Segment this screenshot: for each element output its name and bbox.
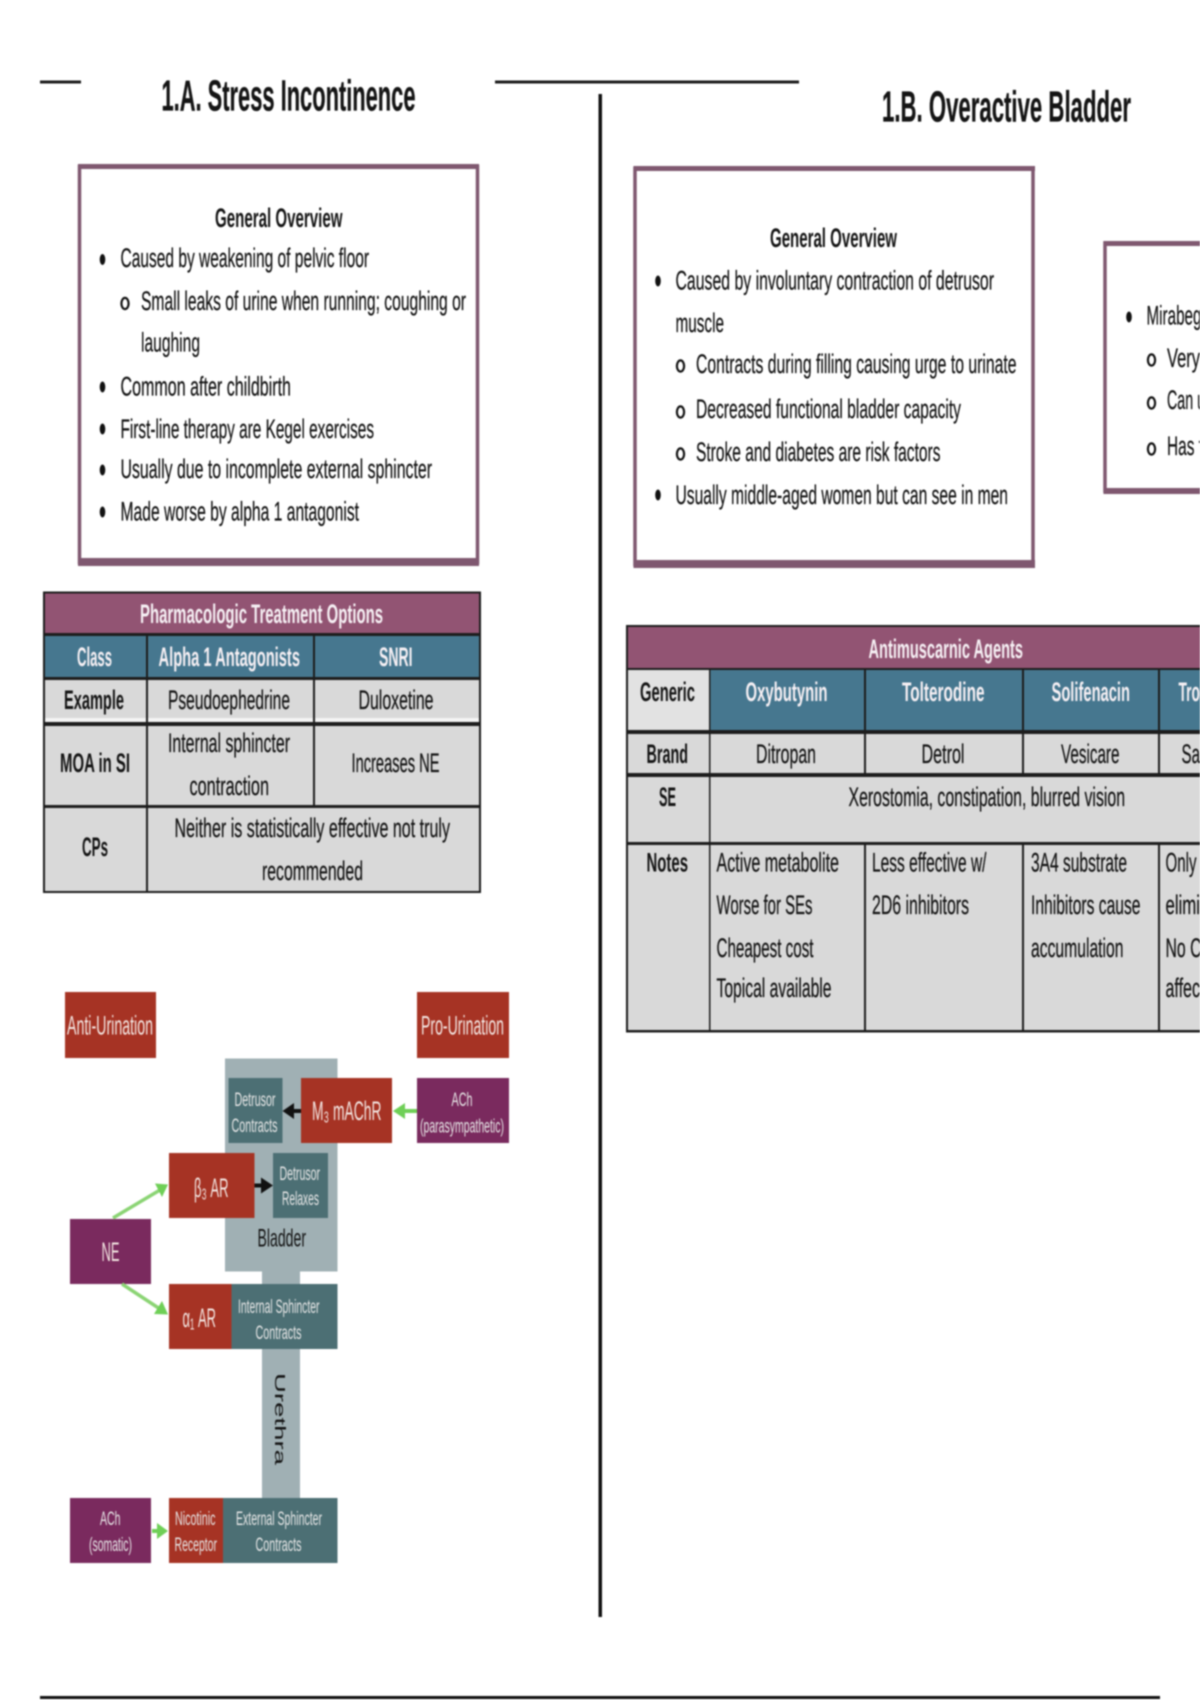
box: nicotinic receptor: Nicotinic bbox=[175, 1509, 216, 1530]
row: brand names: Vesicare bbox=[1061, 739, 1120, 769]
table title: Antimuscarnic Agents bbox=[868, 634, 1023, 664]
row: notes: Topical available bbox=[716, 973, 832, 1003]
row: generic names: Oxybutynin bbox=[746, 677, 828, 707]
box: detrusor contracts: Contracts bbox=[232, 1116, 278, 1137]
row: MOA in SI: MOA in SI bbox=[60, 748, 130, 778]
table title: Pharmacologic Treatment Options bbox=[140, 599, 383, 629]
box: nicotinic receptor bbox=[169, 1498, 223, 1563]
text: 1.A. Stress Incontinence bbox=[162, 72, 416, 120]
box: nicotinic receptor: Receptor bbox=[174, 1535, 217, 1556]
arrow: NE to beta 3 bbox=[113, 1184, 168, 1218]
arrow: M3 to detrusor contracts bbox=[282, 1103, 301, 1119]
box: detrusor relaxes: Detrusor bbox=[280, 1164, 320, 1185]
row: example: Pseudoephedrine bbox=[168, 685, 290, 715]
box: M3 mAChR bbox=[301, 1078, 392, 1143]
row: example: Duloxetine bbox=[358, 685, 434, 715]
bullet list: stress incontinence facts: Usually due to incomplete external sphincter bbox=[120, 454, 432, 484]
row: example bbox=[64, 685, 434, 715]
row: brand names: Detrol bbox=[922, 739, 964, 769]
header row: Alpha 1 Antagonists bbox=[158, 642, 300, 672]
row: side effects: SE bbox=[659, 782, 676, 812]
box: beta 3 AR: β₃ AR bbox=[194, 1173, 228, 1203]
row: generic names: Generic bbox=[640, 677, 695, 707]
box: anti-urination bbox=[65, 992, 156, 1058]
row: generic names: Solifenacin bbox=[1052, 677, 1130, 707]
row: notes: Notes bbox=[646, 848, 688, 878]
row: MOA in SI: contraction bbox=[190, 771, 269, 801]
bullet list: stress incontinence facts: Common after childbirth bbox=[120, 372, 291, 402]
box: external sphincter contracts: External Sphincter bbox=[236, 1509, 322, 1530]
row: notes: Active metabolite bbox=[716, 848, 839, 878]
arrow: ACh to M3 bbox=[393, 1103, 417, 1119]
row: MOA in SI: Increases NE bbox=[352, 748, 440, 778]
box: external sphincter contracts bbox=[223, 1498, 338, 1563]
row: CPs: Neither is statistically effective not truly bbox=[174, 813, 450, 843]
bullet list: overactive bladder facts: Stroke and diabetes are risk factors bbox=[696, 437, 940, 467]
box: alpha 1 AR: α₁ AR bbox=[182, 1303, 216, 1333]
box: M3 mAChR: M₃ mAChR bbox=[312, 1096, 382, 1126]
box: ACh parasympathetic: ACh bbox=[452, 1090, 472, 1111]
row: brand names bbox=[646, 739, 1200, 769]
box: external sphincter contracts: Contracts bbox=[256, 1535, 302, 1556]
panel: stress incontinence general overview bbox=[78, 164, 479, 566]
bullet list: stress incontinence facts: Made worse by alpha 1 antagonist bbox=[120, 496, 359, 526]
box: NE: NE bbox=[102, 1237, 120, 1267]
heading: general overview: General Overview bbox=[770, 223, 897, 253]
table: pharmacologic treatment options bbox=[43, 592, 481, 893]
box: detrusor relaxes: Relaxes bbox=[282, 1189, 319, 1210]
box: ACh parasympathetic bbox=[417, 1078, 509, 1143]
row: generic names: Tolterodine bbox=[902, 677, 984, 707]
row: generic names bbox=[640, 677, 1200, 707]
box: pro-urination bbox=[417, 992, 509, 1058]
row: CPs bbox=[82, 813, 450, 886]
label: urethra: Urethra bbox=[271, 1373, 288, 1466]
table: antimuscarnic agents bbox=[626, 625, 1200, 1032]
row: notes: Worse for SEs bbox=[716, 890, 812, 920]
box: internal sphincter contracts: Contracts bbox=[256, 1323, 302, 1344]
row: notes bbox=[646, 848, 1200, 1003]
row: notes: 3A4 substrate bbox=[1031, 848, 1127, 878]
row: CPs: CPs bbox=[82, 832, 108, 862]
bullet list: overactive bladder facts: Caused by involuntary contraction of detrusor bbox=[676, 266, 994, 296]
row: side effects bbox=[659, 782, 1125, 812]
box: detrusor contracts bbox=[228, 1078, 282, 1143]
row: notes: Less effective w/ bbox=[872, 848, 987, 878]
panel: overactive bladder general overview bbox=[634, 166, 1035, 568]
header row: SNRI bbox=[379, 642, 412, 672]
label: bladder: Bladder bbox=[258, 1224, 306, 1252]
bullet list: overactive bladder facts bbox=[655, 266, 1016, 510]
box: beta 3 AR bbox=[169, 1153, 254, 1218]
box: ACh somatic: (somatic) bbox=[89, 1535, 132, 1556]
diagram: urinary receptor pathways bbox=[65, 992, 509, 1563]
box: internal sphincter contracts bbox=[232, 1284, 338, 1349]
bullet list: stress incontinence facts: Caused by weakening of pelvic floor bbox=[120, 243, 369, 273]
bullet list: stress incontinence facts: Small leaks of urine when running; coughing or bbox=[141, 286, 466, 316]
box: ACh somatic bbox=[70, 1498, 151, 1563]
bullet list: stress incontinence facts bbox=[100, 243, 466, 526]
row: MOA in SI bbox=[60, 728, 440, 801]
row: example: Example bbox=[64, 685, 124, 715]
box: ACh parasympathetic: (parasympathetic) bbox=[420, 1116, 504, 1138]
row: notes: 2D6 inhibitors bbox=[872, 890, 969, 920]
arrow: NE to alpha 1 bbox=[122, 1284, 168, 1314]
row: CPs: recommended bbox=[262, 856, 363, 886]
box: detrusor contracts: Detrusor bbox=[234, 1090, 276, 1111]
box: pro-urination: Pro-Urination bbox=[421, 1010, 504, 1040]
arrow: ACh to nicotinic bbox=[152, 1523, 168, 1539]
header row: Class bbox=[77, 642, 112, 672]
panel: mirabegron notes (cut off at page edge) bbox=[1104, 241, 1200, 494]
box: detrusor relaxes bbox=[273, 1153, 328, 1218]
bullet list: overactive bladder facts: Decreased functional bladder capacity bbox=[696, 394, 961, 424]
box: NE bbox=[70, 1219, 151, 1284]
row: notes: accumulation bbox=[1031, 933, 1124, 963]
row: brand names: Ditropan bbox=[756, 739, 816, 769]
box: ACh somatic: ACh bbox=[100, 1509, 120, 1530]
bullet list: stress incontinence facts: laughing bbox=[141, 328, 200, 358]
bladder and urethra shape bbox=[225, 1058, 338, 1498]
row: MOA in SI: Internal sphincter bbox=[168, 728, 290, 758]
row: brand names: Brand bbox=[646, 739, 688, 769]
arrow: beta 3 to detrusor relaxes bbox=[254, 1178, 273, 1194]
row: notes: Cheapest cost bbox=[716, 933, 814, 963]
bullet list: stress incontinence facts: First-line therapy are Kegel exercises bbox=[120, 414, 374, 444]
heading: general overview: General Overview bbox=[215, 203, 343, 233]
box: anti-urination: Anti-Urination bbox=[67, 1010, 153, 1040]
bullet list: overactive bladder facts: muscle bbox=[676, 308, 724, 338]
box: internal sphincter contracts: Internal Sphincter bbox=[238, 1297, 320, 1318]
box: alpha 1 AR bbox=[169, 1284, 232, 1349]
